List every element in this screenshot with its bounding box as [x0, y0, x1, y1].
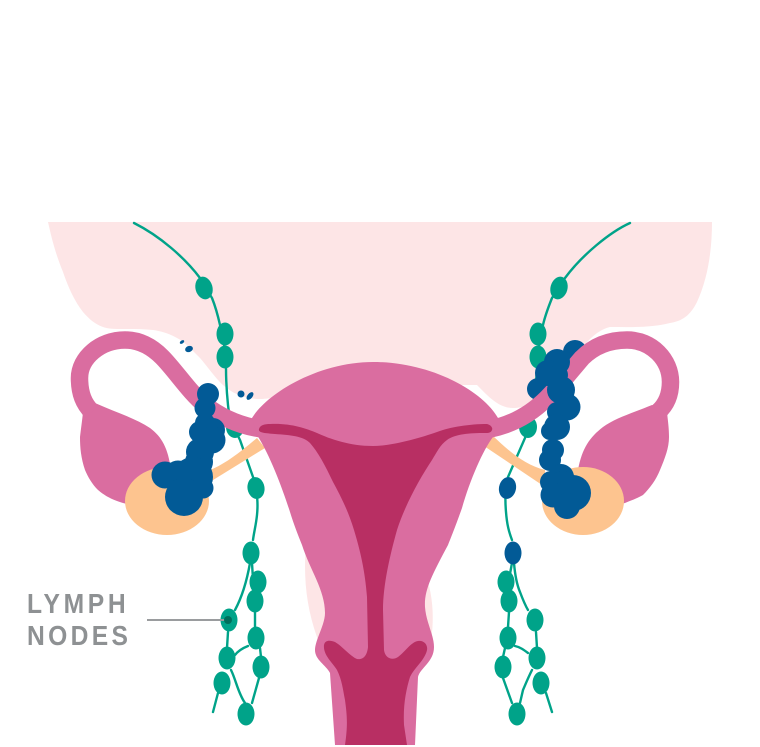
- right tumour deposits behind tube: [527, 340, 587, 400]
- ovary bodies: pink: [80, 403, 669, 510]
- label: lymph nodes: LYMPH: [27, 588, 129, 619]
- label: lymph nodes: NODES: [27, 620, 131, 651]
- fallopian tubes: [80, 340, 670, 429]
- uterine cavity and vaginal canal: [259, 424, 492, 745]
- label: lymph nodes: [27, 588, 131, 651]
- right tumour deposits: [497, 349, 591, 564]
- uterus body and vagina: [252, 362, 498, 745]
- leader line to lymph node: [147, 616, 232, 624]
- left tumour deposits: [152, 339, 255, 516]
- peritoneum background: pale pink: [48, 222, 712, 640]
- right lymph chain: [503, 223, 630, 712]
- left lymph chain: [134, 223, 261, 712]
- ligaments and ovaries: orange: [125, 436, 624, 535]
- lymph nodes: green: [193, 275, 570, 726]
